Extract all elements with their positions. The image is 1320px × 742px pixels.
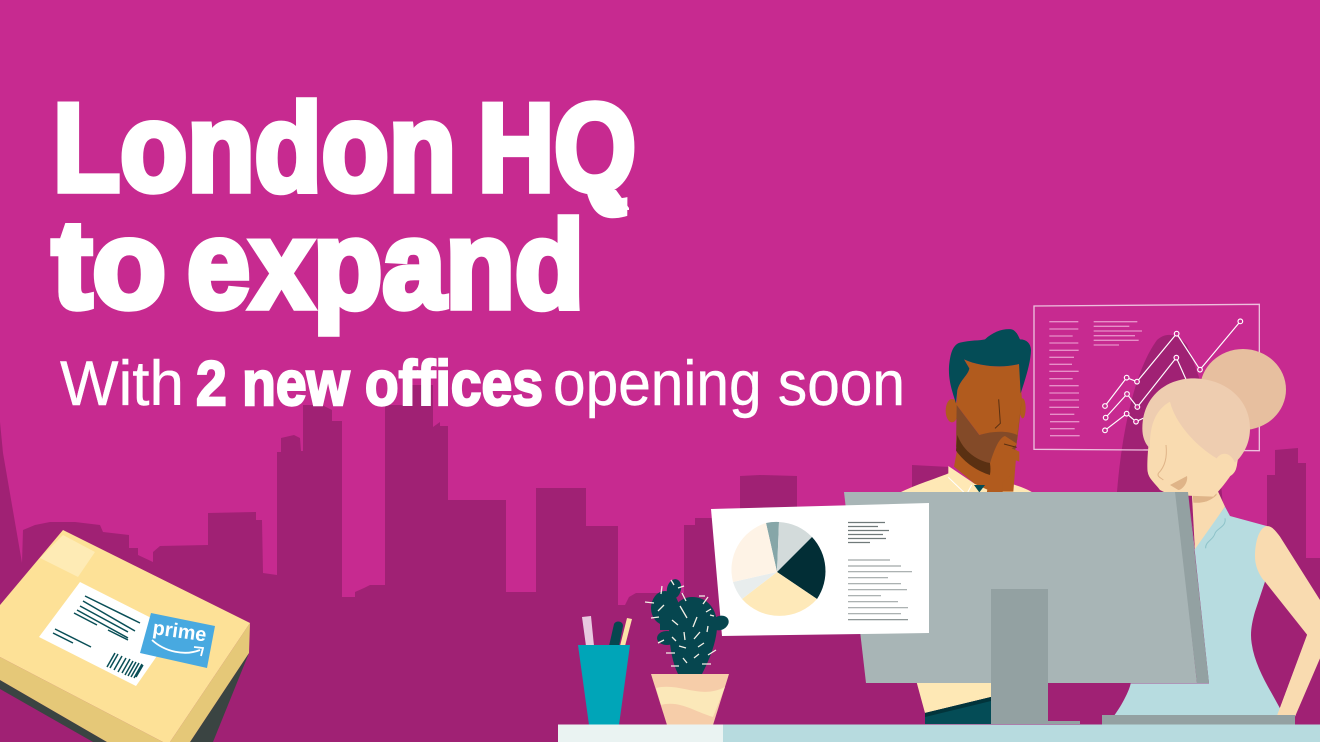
- title: London HQ to expand: HQ: [478, 80, 636, 218]
- city skyline silhouette: [0, 335, 1320, 742]
- woman's head: [1142, 378, 1250, 497]
- pen cup with pens: [578, 616, 632, 725]
- man's ears: [946, 398, 1026, 422]
- plant pot: [651, 674, 729, 725]
- woman's front hair: [1142, 378, 1250, 463]
- desk: [558, 724, 1320, 742]
- parcel top face: [0, 530, 250, 742]
- prime smile arrow: [152, 640, 203, 656]
- man's collar and tie: [948, 477, 972, 492]
- chart panel: line chart on glass board: [1034, 304, 1259, 451]
- cactus: [651, 578, 731, 674]
- woman's neck: [1192, 490, 1225, 552]
- monitor side edge: [1175, 492, 1209, 683]
- subtitle: With 2 new offices opening soon: opening soon: [553, 349, 905, 419]
- parcel shadow: [0, 653, 249, 742]
- man's hand: [987, 436, 1019, 493]
- parcel side faces: [0, 623, 250, 742]
- man's face: [957, 359, 1022, 440]
- title: London HQ to expand: [52, 80, 636, 334]
- parcel tape: [40, 535, 95, 577]
- monitor: [844, 492, 1209, 724]
- label barcode: [107, 653, 143, 678]
- man at desk: [898, 329, 1034, 493]
- keyboard: [1102, 715, 1295, 725]
- pie chart report sheet: [711, 503, 929, 636]
- teal cup: [578, 645, 630, 725]
- yellow pencil: [620, 618, 632, 646]
- cactus plant in pot: [645, 578, 731, 725]
- woman's forearm near edge: [1277, 590, 1320, 716]
- man's hair: [949, 329, 1031, 403]
- subtitle: With 2 new offices opening soon: 2 new offices: [196, 349, 543, 419]
- monitor stand: [991, 589, 1080, 724]
- woman's sleeveless top: [1113, 507, 1280, 717]
- man's shirt: [898, 466, 1034, 493]
- woman: [1113, 349, 1320, 717]
- dark pen: [609, 622, 623, 646]
- title: London HQ to expand: London: [53, 80, 456, 218]
- pink pencil: [582, 616, 594, 646]
- cactus prickles: [645, 580, 716, 666]
- woman's hair bun: [1200, 349, 1286, 430]
- title: London HQ to expand: to: [52, 196, 166, 334]
- line series: [1103, 319, 1243, 433]
- woman's body: [1113, 490, 1320, 717]
- man's lower shirt and trousers: [916, 680, 991, 724]
- address label: [39, 582, 175, 686]
- title: London HQ to expand: expand: [187, 196, 584, 334]
- woman's arm: [1255, 526, 1320, 717]
- prime sticker: [140, 613, 215, 668]
- report text lines: [848, 522, 912, 620]
- man's beard: [956, 398, 1022, 467]
- monitor screen back: [844, 492, 1197, 683]
- subtitle: With 2 new offices opening soon: With: [60, 349, 184, 419]
- text lines: left column: [1049, 322, 1142, 436]
- subtitle: With 2 new offices opening soon: [60, 349, 905, 419]
- pie chart: [731, 522, 825, 616]
- amazon prime parcel: [0, 530, 250, 742]
- prime wordmark: prime: [151, 617, 208, 646]
- label text lines: [53, 596, 140, 647]
- man's neck: [954, 443, 1017, 492]
